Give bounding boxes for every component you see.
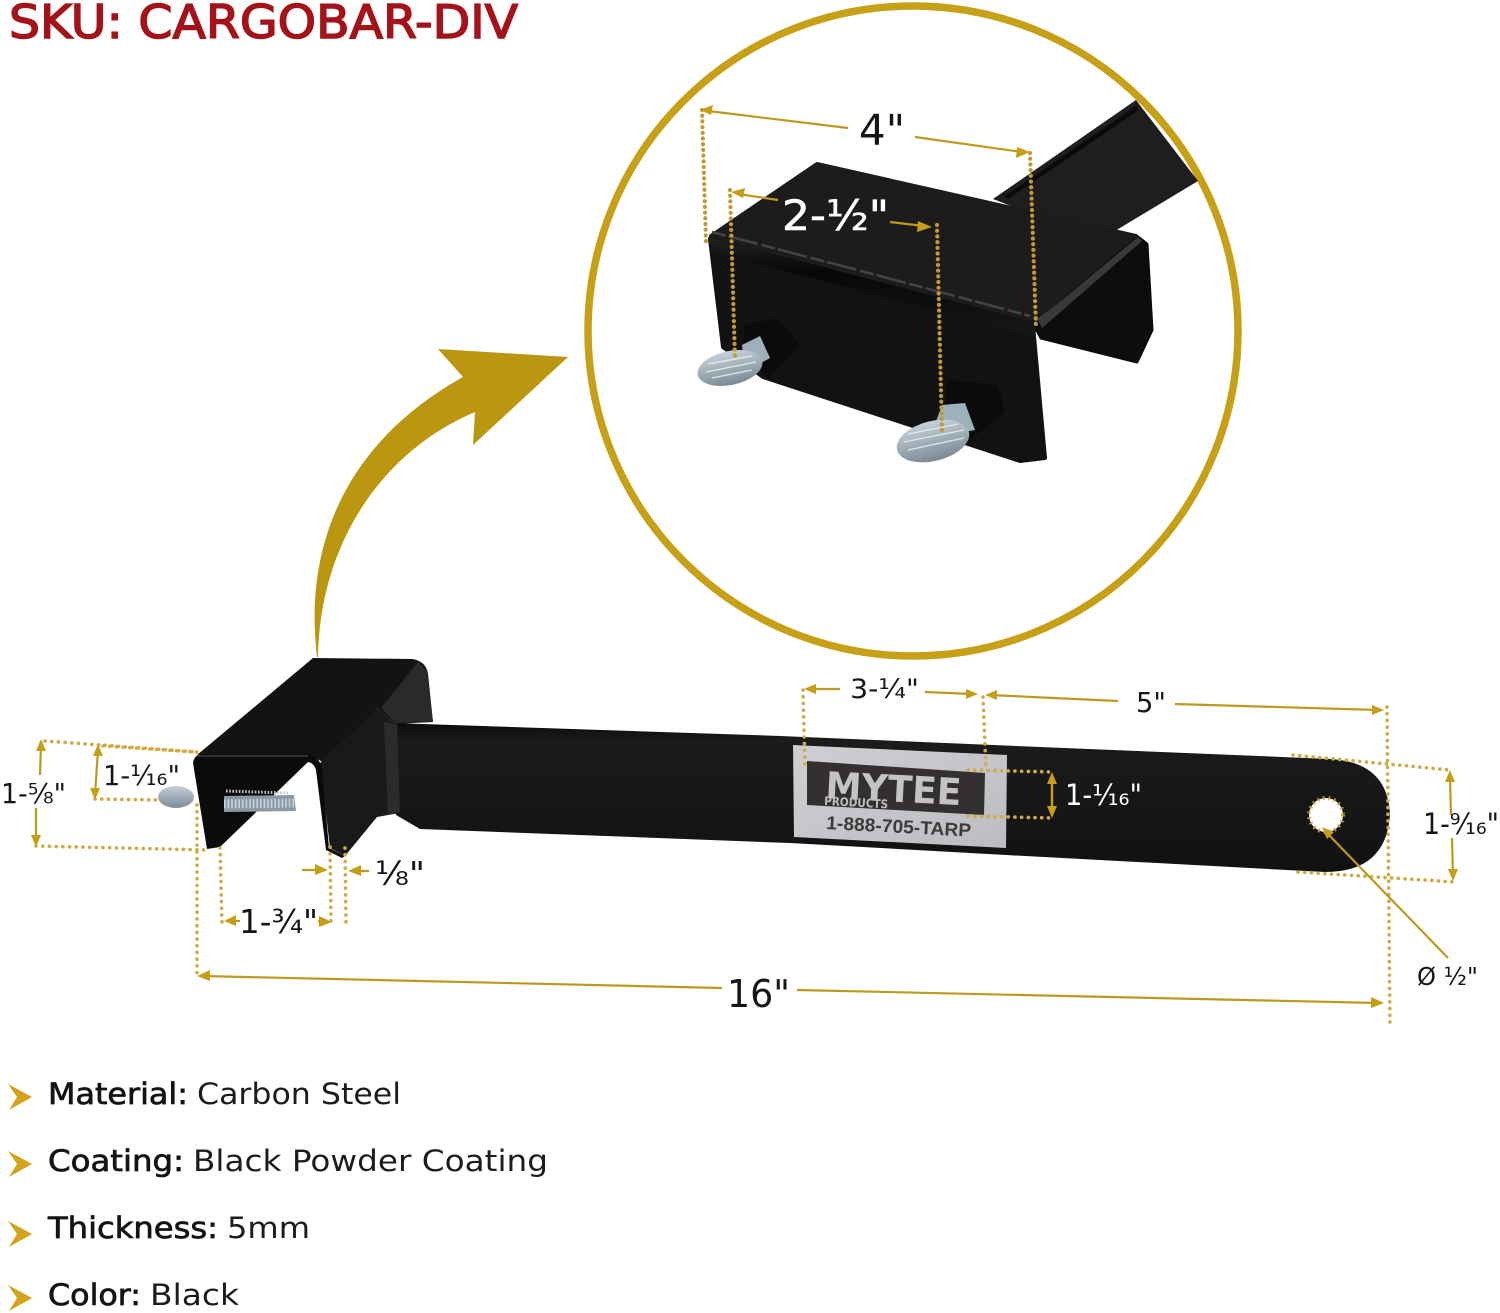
dimension 1-5/8 inch: 1-⅝" <box>1 777 66 810</box>
spec: coating <box>8 1144 548 1178</box>
label plate: 1-888-705-TARP <box>826 812 972 841</box>
dimension 16 inch <box>197 707 1390 1026</box>
dimension hole diameter: Ø ½" <box>1417 962 1478 991</box>
spec: thickness <box>8 1211 310 1247</box>
dimension 1-1/16 inch on bar: 1-¹⁄₁₆" <box>1065 778 1142 812</box>
spec: thickness: Thickness: <box>47 1211 218 1245</box>
label plate: PRODUCTS <box>824 794 888 811</box>
spec: color: Black <box>150 1278 239 1312</box>
full bar product photo <box>158 658 1390 872</box>
label plate <box>793 745 1007 848</box>
spec: coating: Black Powder Coating <box>193 1144 548 1178</box>
dimension 4 inch: 4" <box>859 106 905 156</box>
dimension 1/8 inch: ⅛" <box>375 854 425 893</box>
magnified detail circle <box>588 6 1238 656</box>
dimension 1-1/16 inch on bar <box>968 770 1142 818</box>
dimension 2-1/2 inch <box>730 188 942 433</box>
left wing nut <box>694 318 800 391</box>
spec: material: Carbon Steel <box>197 1077 401 1111</box>
spec: color <box>8 1278 239 1312</box>
dimension 5 inch <box>985 686 1384 719</box>
dimension 2-1/2 inch: 2-½" <box>782 191 889 240</box>
dimension 1-3/4 inch <box>220 847 332 941</box>
right wing nut <box>892 380 1005 469</box>
gold ring <box>588 6 1238 656</box>
dimension 1-9/16 inch <box>1293 755 1499 882</box>
label plate: MYTEE <box>825 764 963 814</box>
flat bar <box>392 723 1390 872</box>
bar seen behind bracket <box>993 100 1198 240</box>
spec: thickness: 5mm <box>227 1211 310 1245</box>
dimension 1-1/16 inch at bracket <box>90 744 197 800</box>
curved arrow to detail <box>315 349 568 657</box>
wing bolt <box>158 786 296 812</box>
bracket <box>193 658 433 858</box>
bracket close-up <box>708 164 1152 461</box>
dimension 16 inch: 16" <box>727 972 790 1016</box>
hole <box>1309 798 1343 832</box>
dimension 3-1/4 inch: 3-¼" <box>850 674 919 705</box>
dimension 3-1/4 inch <box>803 674 986 770</box>
spec: coating: Coating: <box>48 1144 184 1178</box>
spec: material <box>8 1077 401 1111</box>
dimension 1-3/4 inch: 1-¾" <box>239 902 318 941</box>
spec: color: Color: <box>48 1278 141 1312</box>
dimension 1-5/8 inch <box>1 739 207 850</box>
dimension 5 inch: 5" <box>1136 686 1166 719</box>
spec list <box>8 1077 548 1312</box>
dimension hole diameter <box>1322 827 1478 991</box>
spec: material: Material: <box>48 1077 188 1111</box>
dimension 1/8 inch <box>302 848 425 923</box>
dimension 4 inch <box>700 105 1036 327</box>
dimension 1-1/16 inch at bracket: 1-¹⁄₁₆" <box>103 759 180 792</box>
